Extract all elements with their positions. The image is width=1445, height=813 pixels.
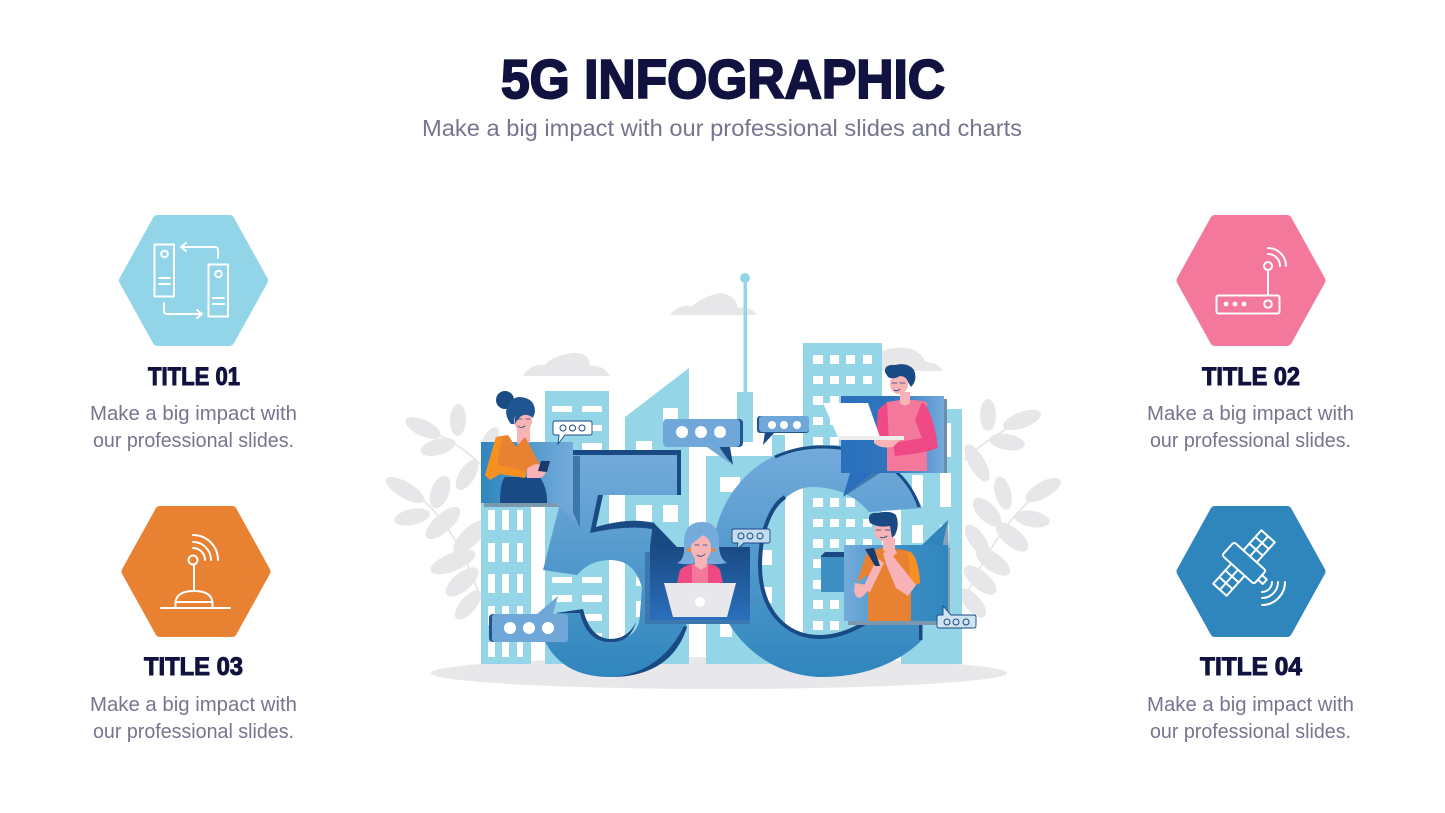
bubble: outlined right [937, 606, 976, 628]
text: title 02 body [1147, 403, 1354, 452]
icon dots [1224, 302, 1246, 306]
panel: woman with phone [481, 391, 580, 528]
panel: man with phone [821, 512, 950, 625]
white laptop [823, 403, 904, 440]
block: title 03 [90, 511, 297, 743]
text: title 03 body: our professional slides. [93, 721, 294, 743]
text: title 02 body: Make a big impact with [1147, 403, 1354, 425]
text: title 03 body [90, 694, 297, 743]
bubble: outlined middle [732, 529, 770, 549]
hexagon: servers [124, 220, 263, 341]
plant: right [955, 399, 1064, 622]
man figure laptop [874, 364, 938, 471]
block: title 01 [90, 220, 297, 452]
text: title 04 body [1147, 694, 1354, 743]
buildings [481, 273, 962, 664]
heading: title 04: TITLE 04 [1200, 653, 1302, 681]
ground shadow [431, 657, 1007, 689]
icon: satellite [1204, 522, 1289, 608]
block: title 04 [1147, 511, 1354, 743]
heading: title 01: TITLE 01 [148, 363, 240, 391]
hexagon: satellite [1182, 511, 1320, 632]
woman figure laptop [677, 522, 727, 583]
block: title 02 [1147, 220, 1354, 452]
bubble: small top [757, 416, 809, 445]
subtitle: Make a big impact with our professional slides and charts [422, 115, 1022, 141]
text: title 01 body [90, 403, 297, 452]
plant: left [382, 404, 503, 624]
text: title 01 body: our professional slides. [93, 430, 294, 452]
text: title 04 body: our professional slides. [1150, 721, 1351, 743]
hexagon: antenna [126, 511, 266, 632]
icon: router [1216, 248, 1286, 314]
illustration: 5G city [382, 273, 1064, 689]
icon: antenna dome [161, 535, 230, 608]
title: 5G INFOGRAPHIC [501, 48, 945, 110]
digit: G [712, 445, 922, 677]
digit: 5 [543, 450, 687, 677]
bubble: outlined left [553, 421, 592, 444]
text: title 01 body: Make a big impact with [90, 403, 297, 425]
panel: man with laptop [823, 364, 947, 497]
woman figure [485, 391, 550, 503]
bubble: bottom left [489, 596, 568, 642]
text: title 02 body: our professional slides. [1150, 430, 1351, 452]
clouds [523, 293, 943, 376]
hexagon: router [1182, 220, 1320, 341]
heading: title 03: TITLE 03 [144, 653, 243, 681]
icon: server exchange [154, 243, 228, 318]
laptop [664, 583, 736, 617]
text: title 03 body: Make a big impact with [90, 694, 297, 716]
panel: woman with laptop [645, 522, 750, 624]
bubble: large top [663, 419, 743, 465]
text: title 04 body: Make a big impact with [1147, 694, 1354, 716]
man figure phone [854, 512, 920, 621]
heading: title 02: TITLE 02 [1202, 363, 1300, 391]
